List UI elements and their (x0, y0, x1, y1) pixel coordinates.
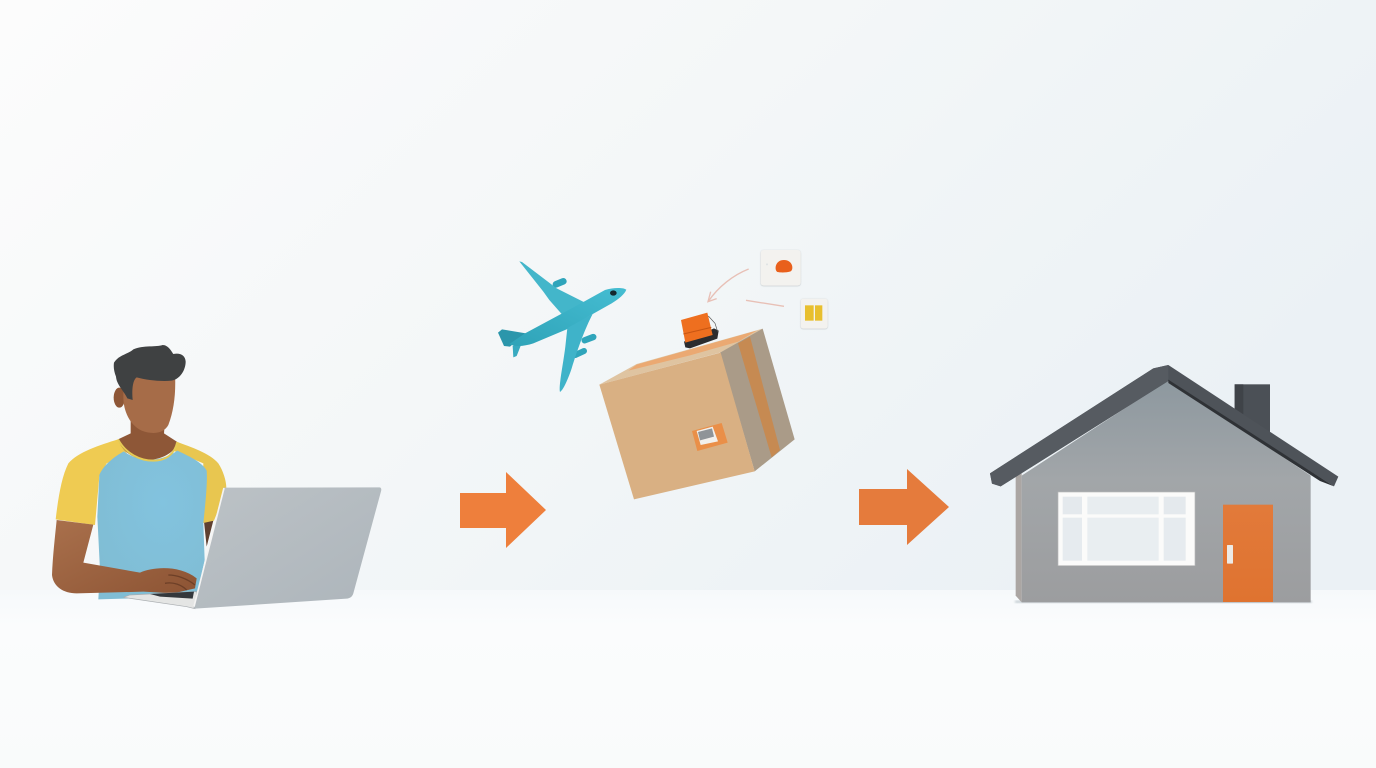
person: yellow right sleeve (173, 442, 226, 523)
small orange cart (681, 313, 719, 348)
arrow two (859, 469, 949, 545)
airplane: engine pods (556, 281, 593, 355)
straight connector line (746, 300, 784, 306)
house: front wall (1022, 380, 1311, 602)
curved arrow to cart (708, 269, 749, 302)
person: head (123, 373, 175, 433)
house: ground shadow (1015, 601, 1312, 603)
floor (0, 590, 1376, 768)
person: yellow left sleeve (56, 439, 127, 525)
house: chimney (1235, 384, 1270, 434)
airplane, box and floating icons (498, 250, 828, 499)
person with laptop (52, 345, 381, 609)
airplane (498, 261, 626, 392)
person: ear (114, 388, 125, 408)
box: top face (599, 329, 763, 385)
airplane: tail fins (498, 329, 526, 347)
house: door (1223, 505, 1273, 602)
box: tape on side (738, 337, 780, 457)
icon card: yellow pause (801, 299, 828, 329)
house: left side wall (1016, 473, 1022, 602)
airplane: fuselage (509, 288, 626, 346)
person: arm (52, 520, 197, 593)
arrow one (460, 472, 546, 548)
laptop base and keyboard (123, 592, 197, 609)
person: neck and collar (118, 420, 177, 460)
airplane: near wing (560, 314, 593, 392)
icon card: orange dome (761, 250, 801, 286)
box: front face (599, 353, 755, 499)
person: torso and blue shirt (97, 451, 207, 599)
person: hair (114, 345, 186, 400)
house: door handle (1227, 545, 1233, 564)
airplane: far wing (519, 261, 585, 314)
box: side face (720, 329, 795, 471)
house (990, 365, 1338, 603)
cardboard box (599, 329, 795, 499)
person: hand fingers (165, 575, 195, 590)
person: far forearm (204, 521, 213, 547)
airplane: cockpit window (610, 290, 617, 296)
house: roof (990, 365, 1338, 486)
laptop lid (193, 487, 381, 609)
box: shipping label (692, 423, 728, 451)
house: window (1058, 492, 1195, 566)
background wall (0, 0, 1376, 592)
